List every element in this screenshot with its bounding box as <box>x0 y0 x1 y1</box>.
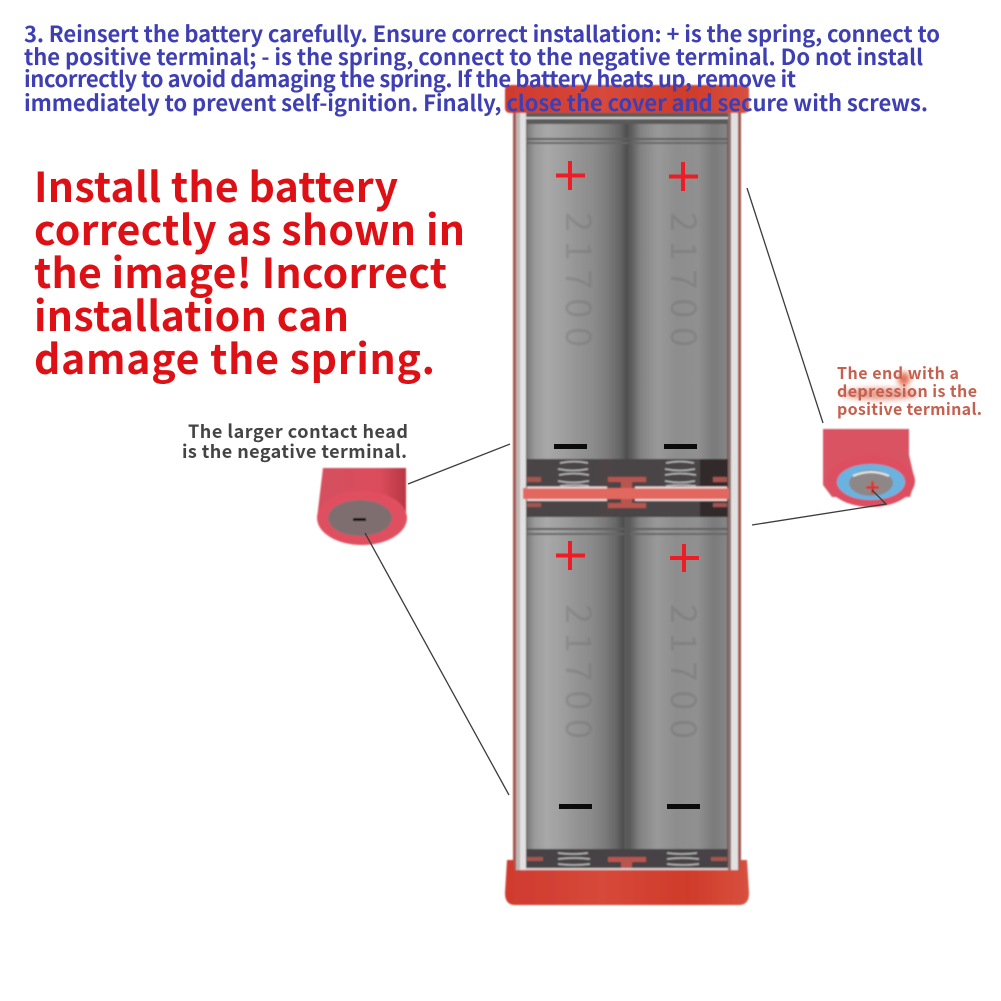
smudge behind positive label <box>842 372 918 400</box>
plus: upper right <box>669 162 698 191</box>
instructions text <box>24 17 940 118</box>
negative terminal label: The larger contact head <box>188 418 408 444</box>
red connector bar <box>523 477 729 508</box>
top cap <box>505 85 749 113</box>
upper left battery <box>527 124 628 459</box>
positive terminal label <box>837 360 982 420</box>
holder body <box>513 100 741 870</box>
upper right battery: 21700 <box>660 212 712 347</box>
instructions text: the positive terminal; - is the spring, connect to the negative terminal. Do not install <box>24 40 923 72</box>
polarity marks <box>556 161 699 572</box>
upper left battery: 21700 <box>555 212 607 347</box>
negative terminal label: is the negative terminal. <box>182 438 407 464</box>
positive terminal label: The end with a <box>837 360 959 384</box>
lower right battery: 21700 <box>660 604 712 739</box>
warning heading: correctly as shown in <box>34 197 465 257</box>
upper left spring <box>558 462 589 486</box>
lower left battery: 21700 <box>555 604 607 739</box>
negative terminal battery <box>317 468 407 545</box>
warning heading: damage the spring. <box>34 326 435 386</box>
bottom cap <box>505 860 749 905</box>
lower right battery <box>630 517 727 850</box>
warning heading: Install the battery <box>34 154 398 214</box>
bottom spring section <box>526 849 728 870</box>
battery holder illustration <box>505 85 749 905</box>
negative terminal label <box>182 418 408 464</box>
instructions text: 3. Reinsert the battery carefully. Ensure correct installation: + is the spring, connect to <box>24 17 940 49</box>
positive terminal label: positive terminal. <box>837 396 982 420</box>
plus: upper left <box>556 161 585 190</box>
leader lines <box>365 188 886 795</box>
lower left battery <box>527 517 624 850</box>
warning heading <box>34 154 465 386</box>
warning heading: the image! Incorrect <box>34 240 447 300</box>
instructions text: immediately to prevent self-ignition. Finally, close the cover and secure with screws. <box>24 86 928 118</box>
positive terminal label: depression is the <box>837 378 977 402</box>
middle spring section <box>523 459 729 517</box>
positive terminal battery <box>823 429 915 507</box>
plus: lower left <box>556 541 585 570</box>
minus marks <box>554 444 700 809</box>
upper right spring <box>665 462 696 486</box>
plus: lower right <box>670 544 699 572</box>
instructions text: incorrectly to avoid damaging the spring. If the battery heats up, remove it <box>24 62 796 94</box>
warning heading: installation can <box>34 283 349 343</box>
upper right battery <box>631 124 727 459</box>
